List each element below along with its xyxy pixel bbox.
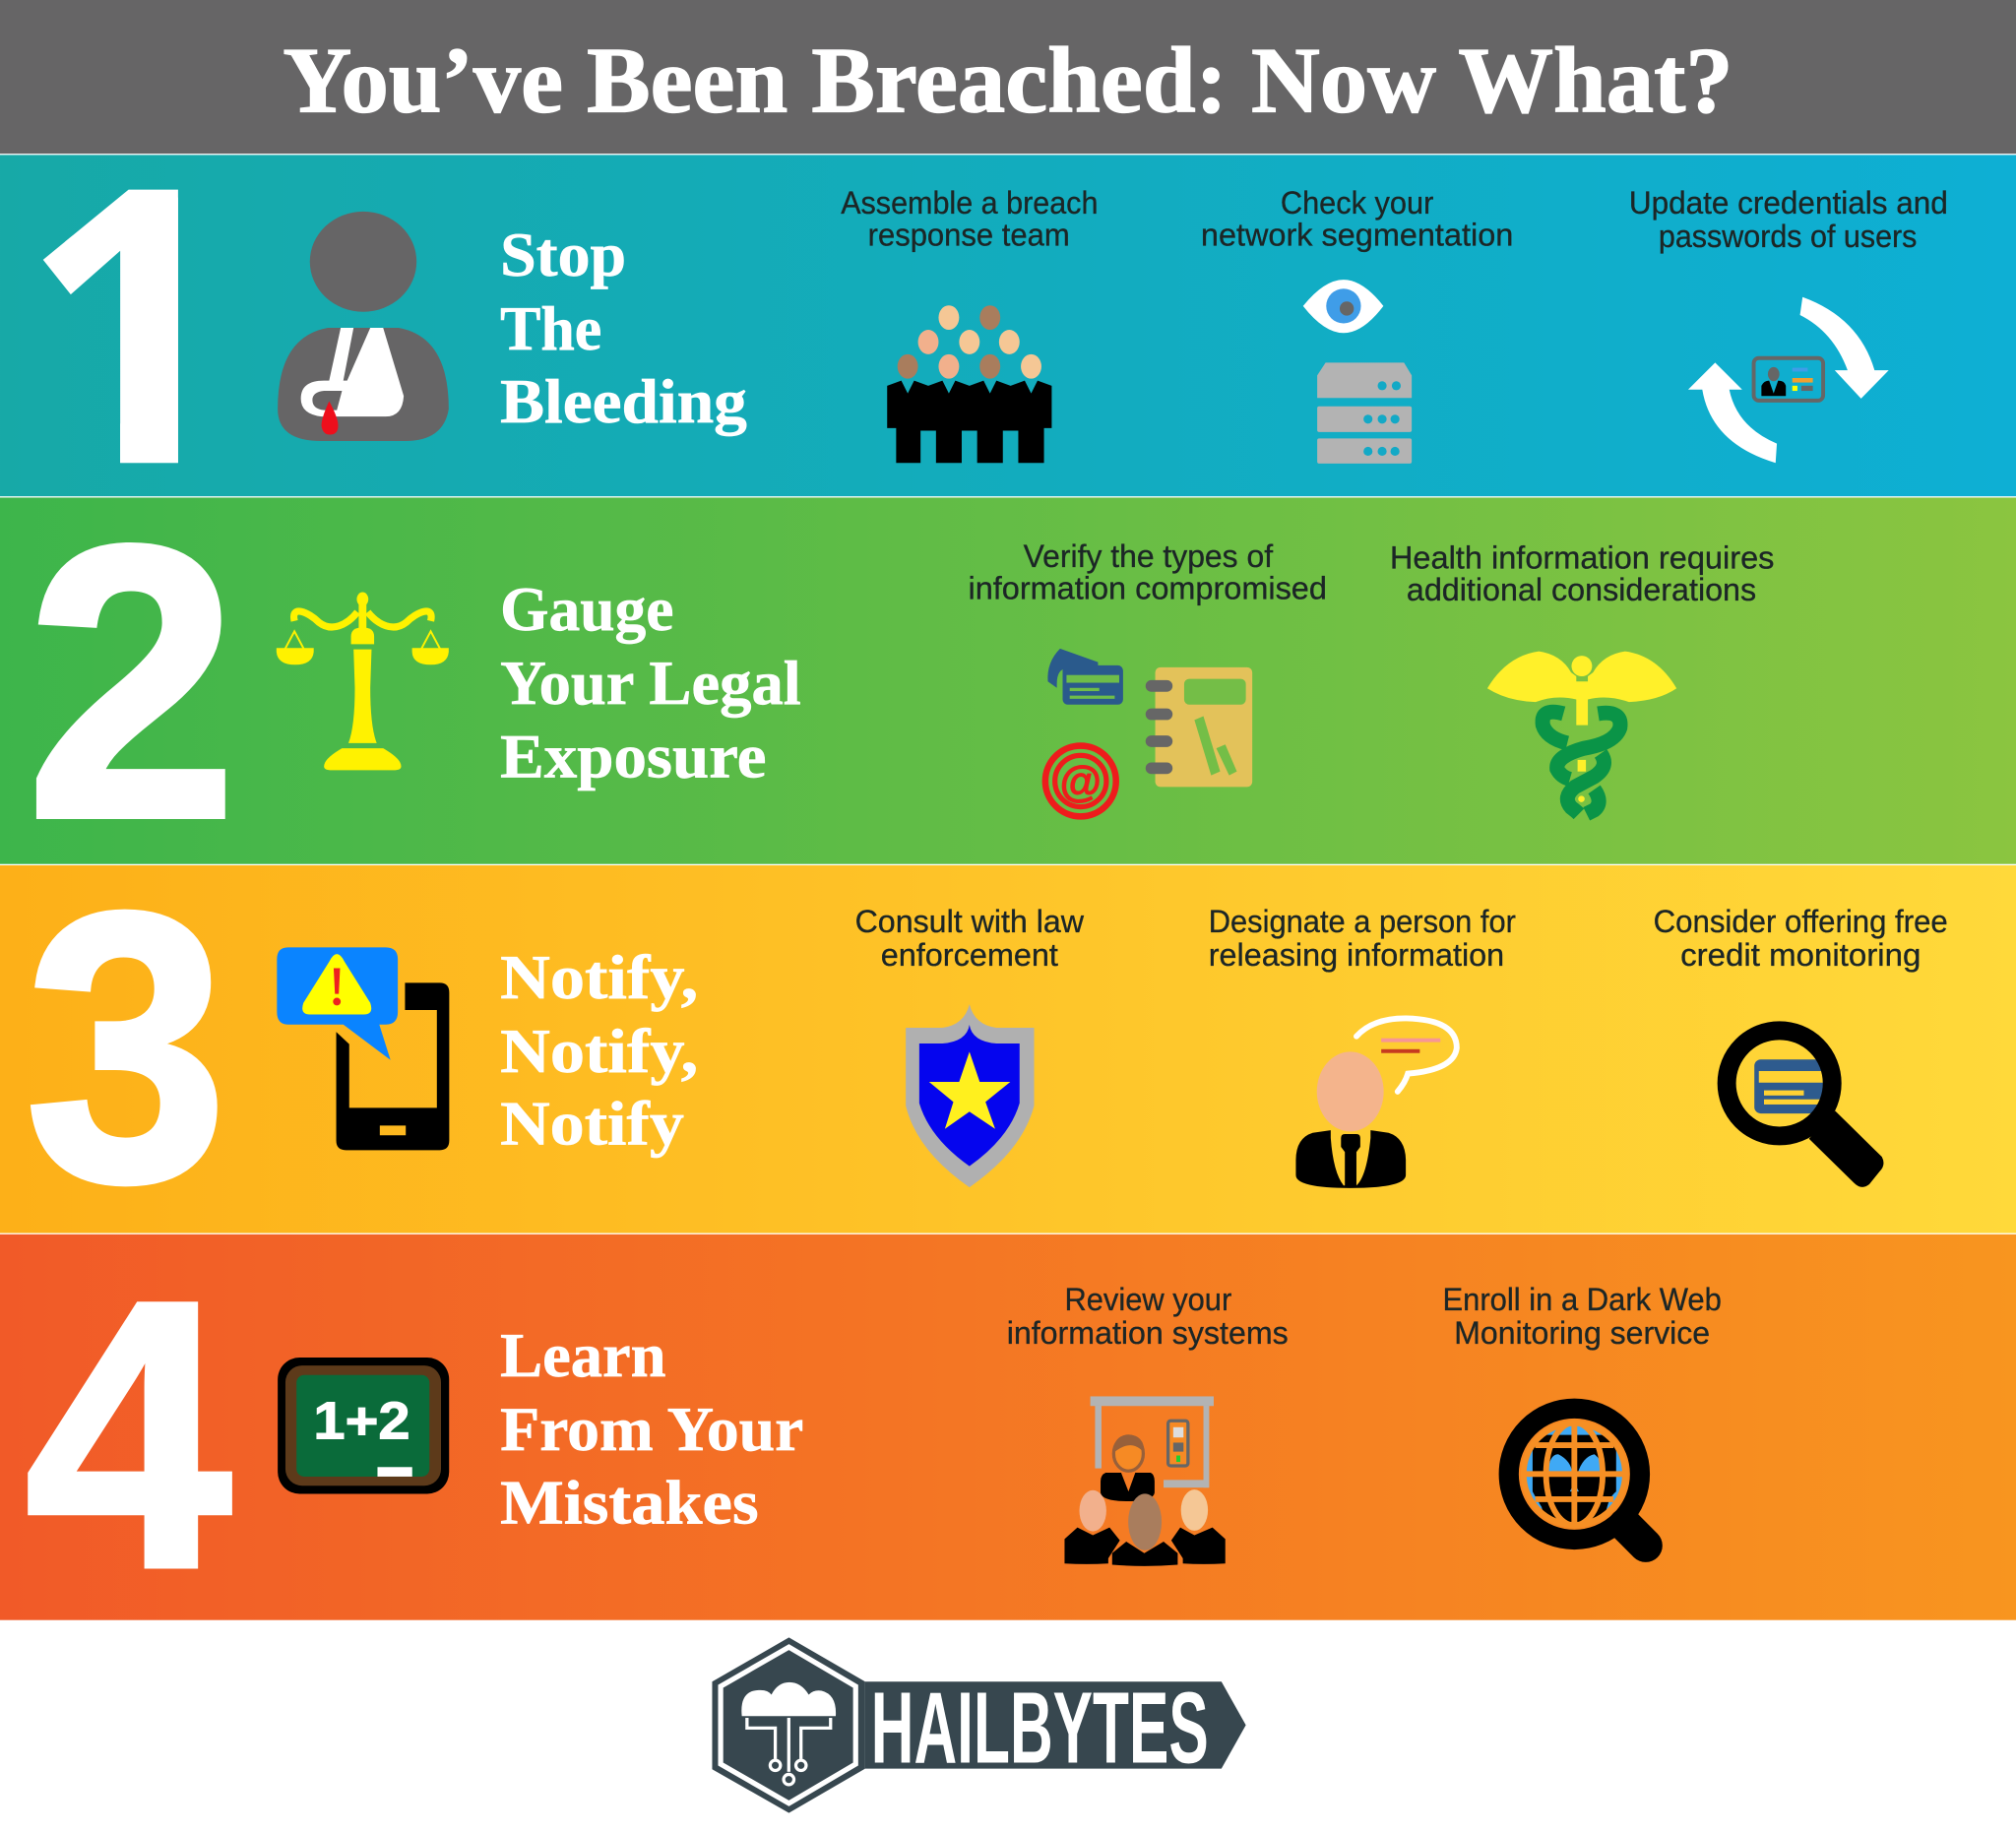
text: consider offering free credit monitoring: Consider offering free (1654, 903, 1948, 939)
heading: gauge your legal exposure: Your Legal (500, 648, 801, 718)
text: consult with law enforcement: Consult with law (855, 903, 1084, 939)
text: consult with law enforcement (855, 903, 1084, 973)
number 3: 3 (26, 835, 227, 1261)
heading: notify notify notify: Notify (500, 1089, 684, 1159)
panel: step 1 stop the bleeding (0, 155, 2016, 496)
number 2: 2 (27, 467, 237, 899)
icon: response team (887, 305, 1051, 463)
heading: gauge your legal exposure: Gauge (500, 574, 673, 644)
text: review your information systems: information systems (1007, 1314, 1289, 1351)
icon: credit card, notebook and email (1045, 649, 1252, 816)
icon: eye over server (1303, 280, 1412, 464)
text: check your network segmentation: network segmentation (1201, 216, 1513, 252)
heading: stop the bleeding: Stop (500, 220, 626, 289)
heading: stop the bleeding: Bleeding (500, 366, 747, 436)
text: enroll in a dark web monitoring service: Enroll in a Dark Web (1442, 1281, 1722, 1317)
text: consider offering free credit monitoring (1654, 903, 1948, 973)
text: check your network segmentation (1201, 184, 1513, 252)
text: assemble a breach response team: response team (868, 216, 1070, 252)
text: check your network segmentation: Check your (1281, 184, 1433, 221)
text: assemble a breach response team: Assemble a breach (841, 184, 1098, 221)
icon: credit card, notebook and email: @ (1060, 758, 1102, 805)
heading: notify notify notify: Notify, (500, 1016, 698, 1086)
panel: step 4 learn from your mistakes (0, 1222, 2016, 1647)
heading: learn from your mistakes: Mistakes (500, 1467, 759, 1537)
text: update credentials and passwords (1629, 184, 1948, 254)
panel: step 2 gauge your legal exposure (0, 467, 2016, 899)
text: verify the types of information: information compromised (969, 570, 1327, 606)
number 1 (43, 189, 178, 463)
text: consult with law enforcement: enforcement (881, 936, 1058, 973)
title banner: You’ve Been Breached: Now What? (283, 29, 1733, 133)
title banner (0, 0, 2016, 154)
heading: learn from your mistakes: Learn (500, 1320, 666, 1390)
heading: stop the bleeding: The (500, 293, 601, 363)
number 4: 4 (25, 1222, 234, 1647)
text: review your information systems (1007, 1281, 1289, 1351)
text: assemble a breach response team (841, 184, 1098, 252)
text: verify the types of information: Verify the types of (1024, 537, 1274, 574)
text: update credentials and passwords: Update credentials and (1629, 184, 1948, 221)
text: designate a person: releasing information (1209, 936, 1504, 973)
text: designate a person (1209, 903, 1516, 973)
text: update credentials and passwords: passwords of users (1659, 218, 1917, 254)
text: consider offering free credit monitoring: credit monitoring (1680, 936, 1921, 973)
heading: notify notify notify: Notify, (500, 942, 698, 1012)
text: enroll in a dark web monitoring service (1442, 1281, 1722, 1351)
heading: gauge your legal exposure (500, 574, 801, 790)
icon: chalkboard (278, 1358, 449, 1493)
icon: chalkboard: 1+2 (313, 1393, 410, 1451)
icon: scales of justice (277, 592, 449, 770)
icon: spokesperson with speech bubble (1295, 1018, 1457, 1188)
number 1: 1 (38, 114, 253, 545)
logo: hailbytes: HAILBYTES (871, 1672, 1209, 1785)
text: health information considerations (1390, 538, 1774, 607)
icon: police shield (906, 1004, 1035, 1187)
text: enroll in a dark web monitoring service: Monitoring service (1454, 1314, 1710, 1351)
icon: credential update cycle (1688, 297, 1889, 463)
logo: hailbytes (712, 1637, 1246, 1813)
text: verify the types of information (969, 537, 1327, 606)
text: health information considerations: Health information requires (1390, 538, 1774, 575)
heading: gauge your legal exposure: Exposure (500, 721, 766, 790)
icon: presenter and audience (1064, 1396, 1226, 1566)
text: designate a person: Designate a person for (1209, 903, 1516, 939)
heading: learn from your mistakes: From Your (500, 1394, 803, 1464)
heading: notify notify notify (500, 942, 698, 1159)
icon: injured person with sling (278, 212, 449, 441)
heading: stop the bleeding (500, 220, 747, 436)
text: review your information systems: Review your (1064, 1281, 1231, 1317)
icon: caduceus (1487, 652, 1676, 814)
panel: step 3 notify (0, 865, 2016, 1233)
icon: phone with alert bubble (277, 947, 449, 1150)
heading: learn from your mistakes (500, 1320, 803, 1537)
icon: magnifier over globe and skull (1509, 1409, 1646, 1546)
text: health information considerations: additional considerations (1407, 571, 1756, 607)
icon: magnifier over credit card (1727, 1031, 1883, 1187)
